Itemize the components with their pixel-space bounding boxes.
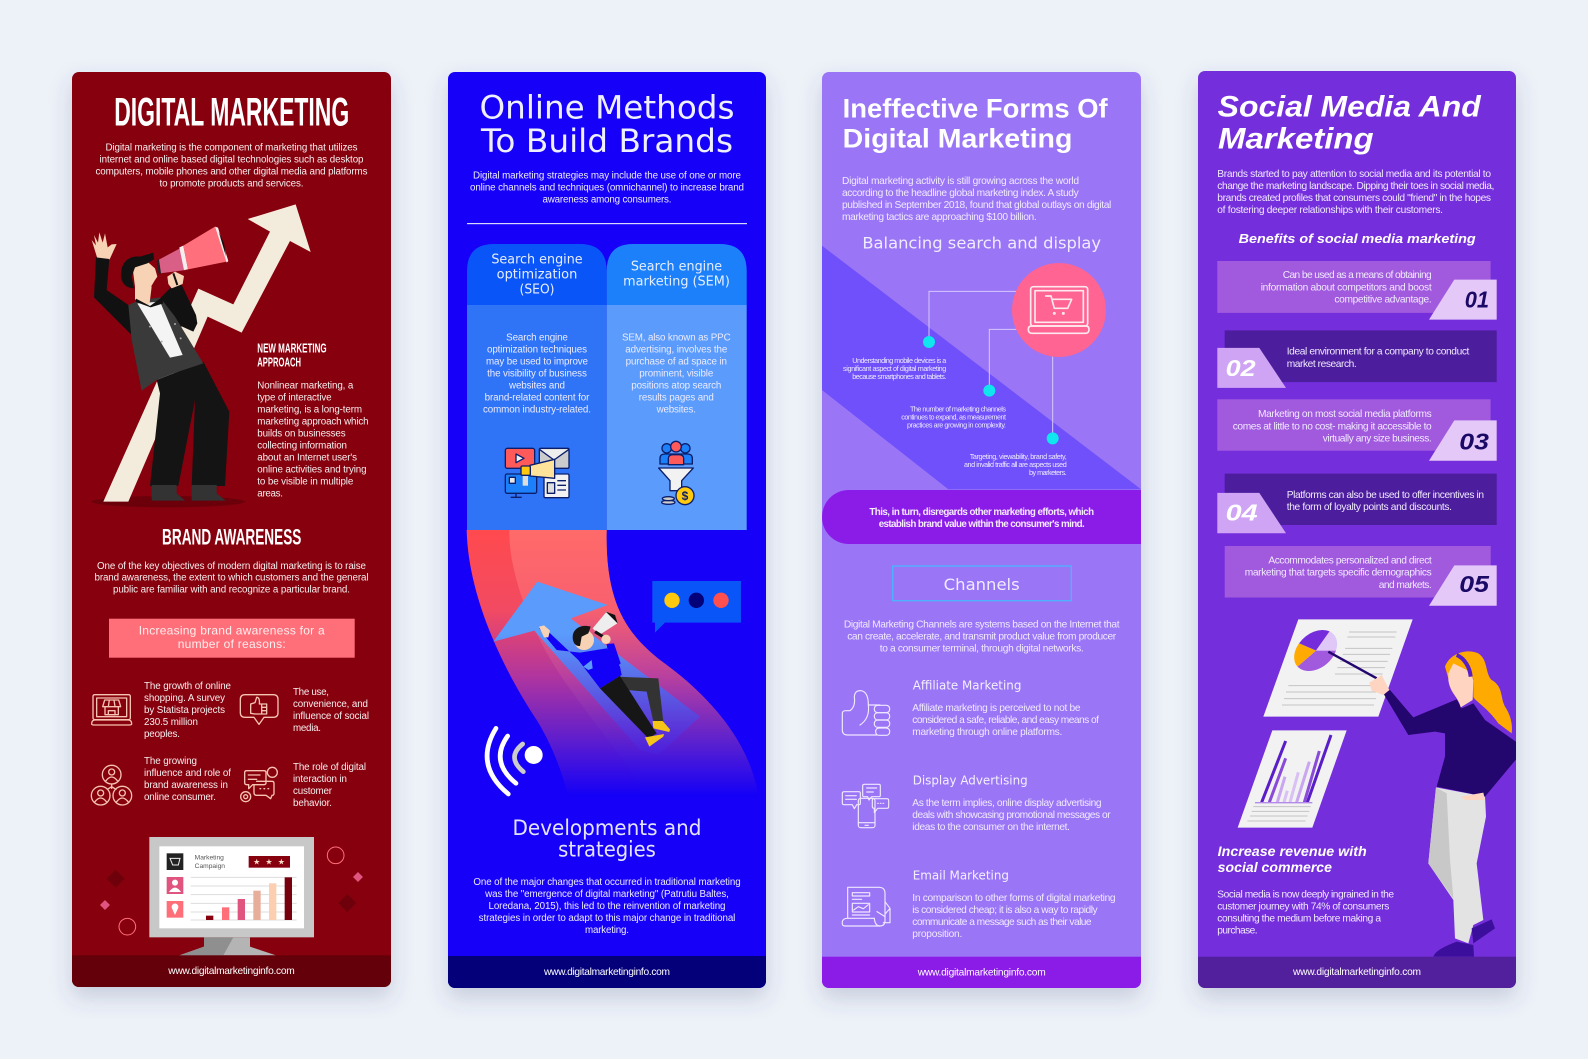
benefit 01: 01 [1465,286,1489,312]
developments paragraph [473,877,741,936]
callout: targeting: Targeting, viewability, brand safety, [970,452,1067,461]
column text: sem: prominent, visible [639,369,714,380]
column text: sem: results pages and [639,393,714,404]
column text: sem: advertising, involves the [625,345,728,356]
benefit 02 [1217,330,1497,388]
social commerce paragraph: customer journey with 74% of consumers [1217,901,1389,912]
column text: sem: purchase of ad space in [626,357,727,368]
intro paragraph: awareness among consumers. [542,195,672,206]
reason: social media: media. [293,723,321,734]
heading box: channels [893,566,1071,601]
column: search engine marketing [607,244,747,530]
icon: email document [842,887,890,926]
reason: digital interaction [293,762,366,809]
heading: new marketing approach: NEW MARKETING [257,341,327,356]
reason: social media: The use, [293,687,329,698]
icon: sales funnel [659,441,694,505]
illustration: presenting woman [1328,651,1518,957]
icon: signal waves [487,728,543,794]
social commerce paragraph: Social media is now deeply ingrained in the [1217,889,1394,900]
column heading: sem [623,259,730,290]
brand awareness paragraph: brand awareness, the extent to which customers and the general [94,573,368,584]
illustration: monitor with marketing campaign chart: ★ [278,858,285,867]
reason: online shopping [144,681,232,740]
column text: seo: the visibility of business [487,369,587,380]
column text: seo: websites and [508,381,565,392]
reason: online consumer: The growing [144,756,197,767]
reason: digital interaction: The role of digital [293,762,366,773]
callout: mobile devices [843,356,946,381]
reason: online consumer: online consumer. [144,792,216,803]
illustration: monitor with marketing campaign chart: Campaign [195,863,225,870]
developments paragraph: One of the major changes that occurred in traditional marketing [473,877,741,888]
benefit 02: 02 [1226,355,1256,381]
footer: website: www.digitalmarketinginfo.com [1292,967,1421,978]
intro paragraph [842,176,1111,223]
footer: website: www.digitalmarketinginfo.com [167,966,295,977]
benefit 01: Can be used as a means of obtaining [1283,270,1432,281]
illustration: ribbon with arrow and flying man [467,530,758,797]
benefit 03: 03 [1459,428,1489,454]
column text: seo [483,333,591,416]
column text: sem: websites. [656,405,696,416]
heading: developments and strategies: Developments and [512,816,702,840]
callout: increasing brand awareness: number of reasons: [178,637,286,651]
social commerce paragraph: consulting the medium before making a [1217,913,1381,924]
benefit 02: market research. [1287,359,1357,370]
benefit 05: marketing that targets specific demographics [1245,568,1432,579]
illustration: monitor with marketing campaign chart: Marketing [195,854,224,861]
icon: connected people [91,765,132,805]
icon: thumbs up [842,691,890,735]
brand awareness paragraph [94,561,368,596]
callout: marketing channels: The number of marketing channels [910,405,1006,414]
title: social media and marketing: Social Media And [1218,90,1481,123]
title: ineffective forms of digital marketing: Digital Marketing [843,123,1072,153]
callout: targeting: and invalid traffic all are aspects used [964,460,1067,469]
heading: developments and strategies: strategies [558,838,656,862]
callout: targeting: by marketers. [1029,468,1067,477]
display advertising text: Display Advertising [913,773,1028,787]
footer: website [448,956,766,988]
title: ineffective forms of digital marketing [843,93,1109,153]
display advertising text [912,773,1111,833]
new marketing approach text: marketing, is a long-term [257,405,362,416]
illustration: man with megaphone and rising arrow [92,204,311,507]
display advertising text: As the term implies, online display advertising [912,798,1102,809]
diagonal band [822,246,1141,489]
benefit 05: Accommodates personalized and direct [1268,556,1432,567]
heading box: channels: Channels [944,575,1020,594]
intro paragraph [470,171,744,206]
illustration: monitor with marketing campaign chart: ★ [253,858,260,867]
reason: online shopping: by Statista projects [144,705,225,716]
benefit 01: information about competitors and boost [1261,282,1432,293]
callout: marketing channels [901,405,1006,430]
icon: marketing mix [505,448,569,498]
title: online methods to build brands [480,88,734,160]
callout: mobile devices: Understanding mobile devices is a [852,356,946,365]
benefit 03: comes at little to no cost- making it accessible to [1233,421,1432,432]
column text: seo: optimization techniques [487,345,587,356]
email marketing text: Email Marketing [913,868,1009,882]
display advertising text: ideas to the consumer on the internet. [912,822,1070,833]
reason: online shopping: The growth of online [144,681,232,692]
decorative shapes around monitor [100,847,363,935]
benefit 03: virtually any size business. [1323,433,1432,444]
reason: online consumer: influence and role of [144,768,231,779]
callout: marketing channels: continues to expand, as measurement [901,413,1006,422]
benefit 01: competitive advantage. [1334,294,1432,306]
channels paragraph: can create, accelerate, and transmit product value from producer [847,631,1117,642]
column text: seo: common industry-related. [483,405,591,416]
display advertising text: deals with showcasing promotional messages or [912,810,1111,821]
intro paragraph: change the marketing landscape. Dipping their toes in social media, [1217,181,1494,192]
heading: new marketing approach [257,341,327,370]
title: digital marketing: DIGITAL MARKETING [114,91,349,135]
reason: social media: convenience, and [293,699,368,710]
affiliate marketing text: Affiliate marketing is perceived to not be [912,703,1081,714]
reason: digital interaction: interaction in [293,774,347,785]
column heading: seo: (SEO) [520,281,554,297]
illustration: report with pie chart [1263,619,1413,717]
benefit 05 [1225,546,1497,606]
new marketing approach text: builds on businesses [257,429,346,440]
panel: online methods [448,72,766,988]
illustration: monitor with marketing campaign chart [149,837,314,955]
intro paragraph [1217,169,1494,216]
new marketing approach text: type of interactive [257,393,332,404]
benefit 02: Ideal environment for a company to conduct [1287,347,1470,358]
reason: social media [293,687,369,734]
benefit 04: 04 [1226,500,1258,526]
reason: digital interaction: customer [293,786,333,797]
reason: online shopping: peoples. [144,729,180,740]
intro paragraph: Digital marketing activity is still growing across the world [842,176,1079,187]
callout pill: brand value: establish brand value within the consumer's mind. [879,519,1085,530]
column text: sem: positions atop search [631,381,721,392]
benefit 05: 05 [1459,571,1490,597]
affiliate marketing text: considered a safe, reliable, and easy means of [912,715,1099,726]
callout: increasing brand awareness: Increasing brand awareness for a [139,623,325,637]
developments paragraph: strategies in order to adapt to this major change in traditional [479,913,735,924]
heading: benefits of social media marketing: Benefits of social media marketing [1239,231,1476,246]
title: social media and marketing [1218,90,1481,156]
heading: increase revenue with social commerce [1218,844,1367,875]
intro paragraph: computers, mobile phones and other digital media and platforms [96,167,368,178]
intro paragraph: published in September 2018, found that global outlays on digital [842,200,1111,211]
new marketing approach text: marketing approach which [257,417,369,428]
brand awareness paragraph: One of the key objectives of modern digital marketing is to raise [97,561,367,572]
reason: online consumer: brand awareness in [144,780,228,791]
channels paragraph: to a consumer terminal, through digital networks. [880,643,1084,654]
intro paragraph: marketing tactics are approaching $100 billion. [842,212,1037,223]
email marketing text: proposition. [912,929,962,940]
panel: digital marketing [72,72,391,987]
illustration: monitor with marketing campaign chart: ★ [265,858,273,867]
column heading: sem: marketing (SEM) [623,274,730,290]
callout pill: brand value [822,490,1141,544]
new marketing approach text: online activities and trying [257,465,367,476]
new marketing approach text: collecting information [257,441,347,452]
intro paragraph: Digital marketing strategies may include the use of one or more [473,171,742,182]
new marketing approach text [257,381,369,500]
callout: targeting [964,452,1067,477]
title: social media and marketing: Marketing [1218,123,1374,156]
icon: sales funnel: $ [682,489,689,503]
footer: website [72,955,391,987]
new marketing approach text: areas. [257,489,283,500]
heading: developments and strategies [512,816,702,862]
email marketing text: communicate a message such as their value [912,917,1092,928]
channels paragraph: Digital Marketing Channels are systems based on the Internet that [844,619,1120,630]
title: online methods to build brands: To Build Brands [480,122,733,160]
panel: ineffective forms [822,72,1141,989]
reason: social media: influence of social [293,711,369,722]
column text: sem: SEM, also known as PPC [622,333,731,344]
email marketing text: is considered cheap; it is also a way to rapidly [912,905,1099,916]
column heading: sem: Search engine [631,259,722,275]
benefit 04: the form of loyalty points and discounts. [1287,502,1452,513]
intro paragraph: brands created profiles that consumers could "friend" in the hopes [1217,193,1491,204]
intro paragraph: of fostering deeper relationships with their customers. [1217,205,1443,216]
column text: seo: brand-related content for [485,393,590,404]
benefit 03: Marketing on most social media platforms [1258,409,1432,420]
reason: online shopping: shopping. A survey [144,693,225,704]
intro paragraph: to promote products and services. [160,179,304,190]
intro paragraph: Digital marketing is the component of marketing that utilizes [106,143,358,154]
callout: mobile devices: significant aspect of digital marketing [843,364,946,373]
new marketing approach text: Nonlinear marketing, a [257,381,354,392]
benefit 04 [1217,474,1497,533]
reason: digital interaction: behavior. [293,798,332,809]
reason: online shopping: 230.5 million [144,717,198,728]
column: search engine optimization [467,244,607,530]
footer: website: www.digitalmarketinginfo.com [917,967,1046,978]
benefit 05: and markets. [1379,580,1432,591]
heading: balancing search and display: Balancing search and display [862,233,1101,252]
column heading: seo: optimization [497,266,577,282]
affiliate marketing text: Affiliate Marketing [913,678,1021,692]
heading: increase revenue with social commerce: social commerce [1218,860,1333,875]
intro paragraph [96,143,368,190]
affiliate marketing text [912,678,1099,738]
affiliate marketing text: marketing through online platforms. [912,727,1062,738]
heading: new marketing approach: APPROACH [257,355,301,370]
icon: chat bubbles [241,767,277,802]
icon: laptop store [92,695,132,725]
intro paragraph: Brands started to pay attention to social media and its potential to [1217,169,1491,180]
title: ineffective forms of digital marketing: Ineffective Forms Of [843,93,1109,123]
brand awareness paragraph: public are familiar with and recognize a particular brand. [113,585,350,596]
column heading: seo: Search engine [491,251,583,267]
developments paragraph: Loredana, 2015), this led to the reinvention of marketing [488,901,726,912]
callout: marketing channels: practices are growing in complexity. [907,421,1006,430]
column text: seo: Search engine [506,333,568,344]
speech bubble with dots [652,581,741,633]
channels paragraph [844,619,1120,654]
footer: website: www.digitalmarketinginfo.com [543,967,670,978]
icon: thumbs up bubble [240,695,278,724]
icon: phone with chat bubbles [842,784,889,828]
benefit 04: Platforms can also be used to offer incentives in [1287,490,1484,501]
callout: mobile devices: because smartphones and tablets. [852,372,946,381]
illustration: report with bar chart [1238,730,1347,828]
column text: seo: may be used to improve [486,357,589,368]
panel: social media [1198,71,1518,989]
email marketing text: In comparison to other forms of digital marketing [912,893,1116,904]
heading: brand awareness: BRAND AWARENESS [162,524,301,549]
footer: website [822,957,1141,989]
social commerce paragraph: purchase. [1217,925,1258,936]
social commerce paragraph [1217,889,1394,936]
reason: online consumer [144,756,231,803]
footer: website [1198,957,1516,989]
column heading: seo [491,251,583,297]
benefit 03 [1217,399,1497,461]
developments paragraph: marketing. [585,925,629,936]
intro paragraph: online channels and techniques (omnichannel) to increase brand [470,183,744,194]
callout pill: brand value: This, in turn, disregards other marketing efforts, which [869,507,1094,518]
new marketing approach text: about an Internet user's [257,453,357,464]
intro paragraph: internet and online based digital technologies such as desktop [100,155,364,166]
new marketing approach text: to be visible in multiple [257,477,354,488]
diagram: cart laptop with connectors [923,263,1106,444]
benefit 01 [1217,261,1497,320]
developments paragraph: was the "emergence of digital marketing" (Patrutiu Baltes, [484,889,729,900]
title: online methods to build brands: Online Methods [480,88,734,126]
email marketing text [912,868,1116,940]
callout: increasing brand awareness [109,619,355,658]
intro paragraph: according to the headline global marketing index. A study [842,188,1080,199]
column text: sem [622,333,731,416]
heading: increase revenue with social commerce: Increase revenue with [1218,844,1367,859]
